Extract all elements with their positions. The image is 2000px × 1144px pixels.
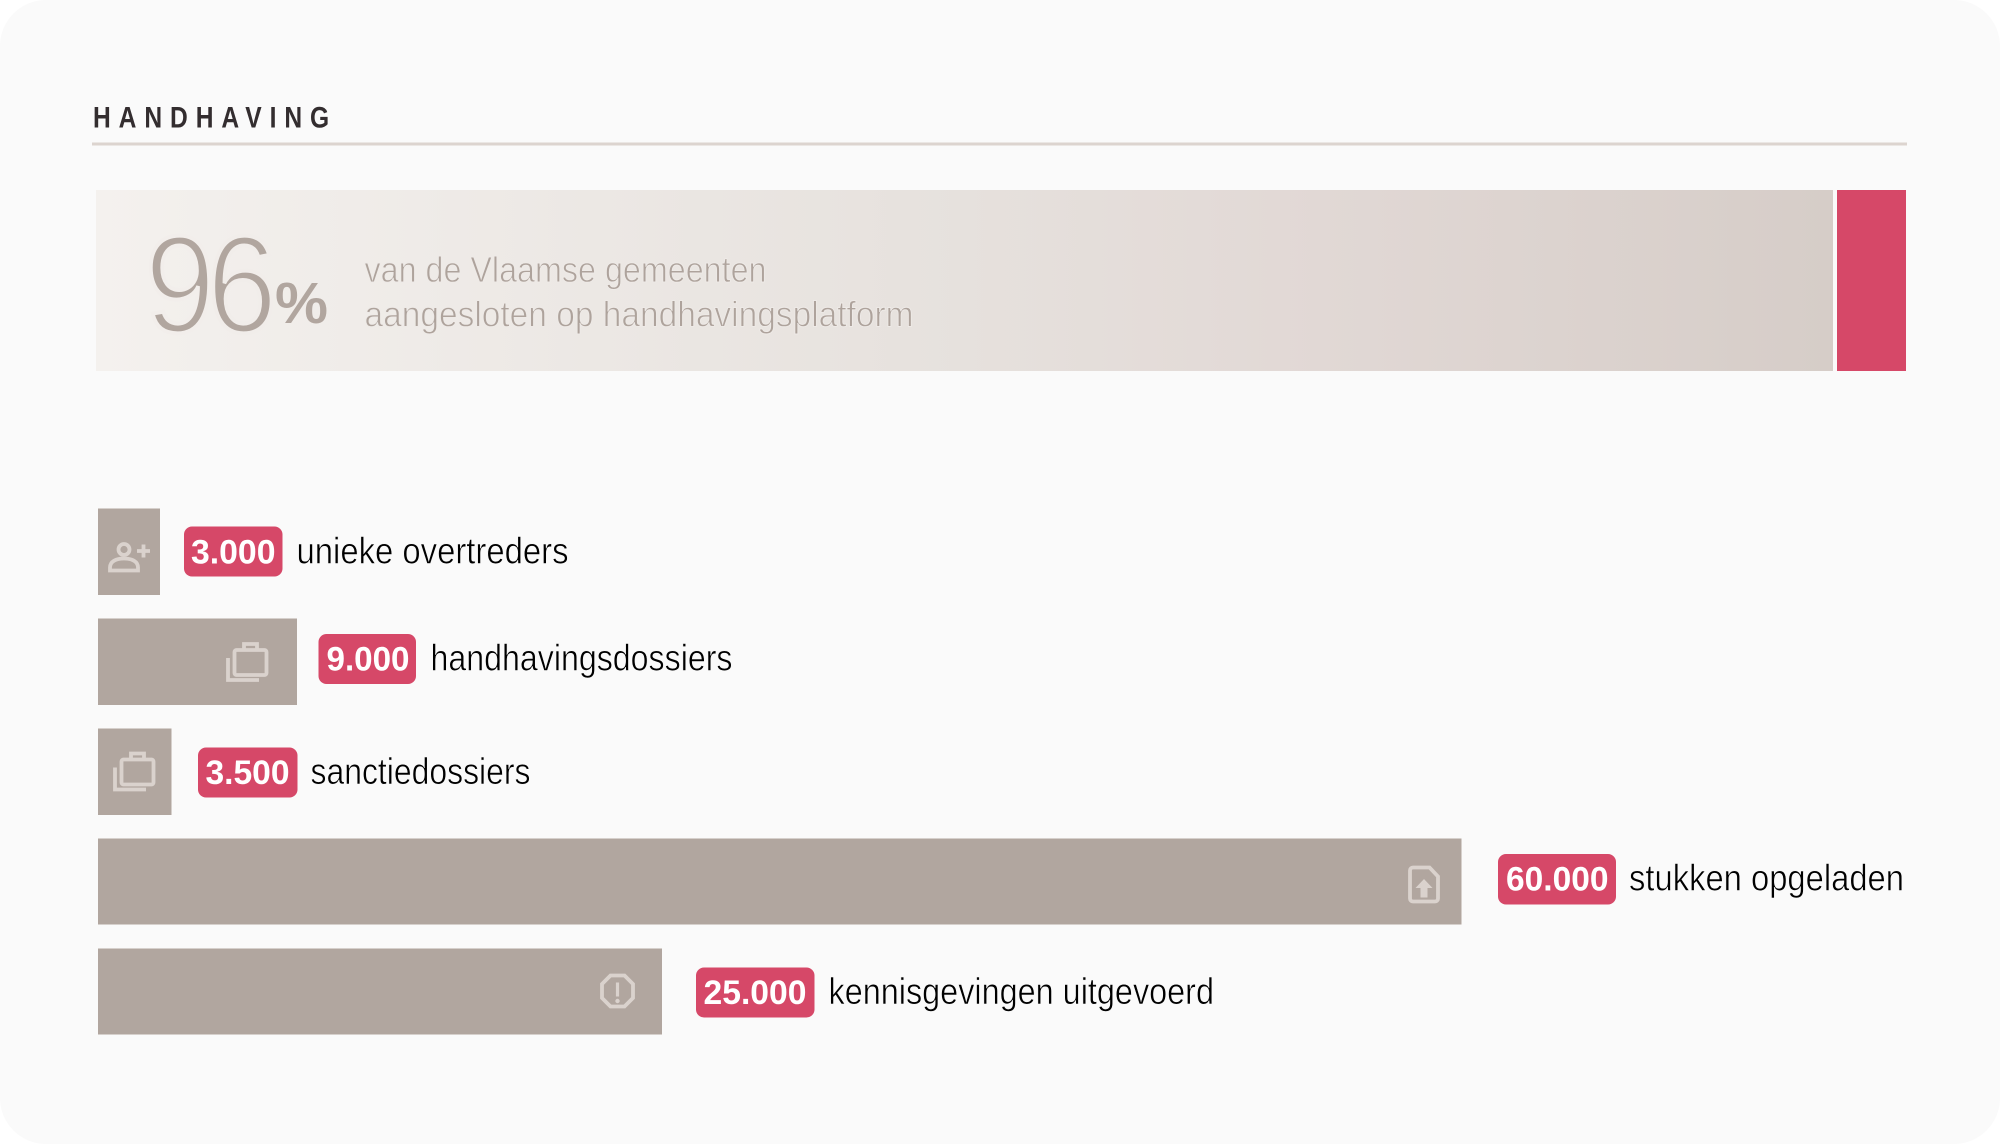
icon: warning octagon bbox=[602, 976, 633, 1006]
row: stukken opgeladen bbox=[98, 838, 1904, 924]
label: stukken opgeladen bbox=[1629, 858, 1904, 899]
icon: file upload bbox=[1410, 868, 1438, 902]
bar bbox=[98, 948, 662, 1034]
row: sanctiedossiers bbox=[98, 728, 530, 815]
value badge bbox=[696, 968, 814, 1018]
value badge: 3.000 bbox=[191, 533, 276, 571]
heading bbox=[92, 100, 1907, 146]
row: handhavingsdossiers bbox=[98, 618, 732, 705]
big number 96%: 9 bbox=[145, 208, 215, 362]
icon: person plus bbox=[110, 544, 150, 570]
red bar: remaining municipalities bbox=[1837, 190, 1906, 371]
value badge: 9.000 bbox=[326, 641, 410, 679]
icon: briefcase stack bbox=[228, 644, 266, 680]
row: kennisgevingen uitgevoerd bbox=[98, 948, 1214, 1034]
icon: briefcase stack bbox=[115, 754, 154, 790]
value badge bbox=[1498, 854, 1616, 904]
panel: 96 percent of municipalities bbox=[96, 190, 1906, 371]
value badge bbox=[318, 634, 416, 684]
value badge bbox=[198, 748, 298, 798]
description text: aangesloten op handhavingsplatform bbox=[364, 294, 914, 335]
big number 96% bbox=[145, 208, 328, 362]
value badge: 60.000 bbox=[1506, 861, 1608, 899]
label: kennisgevingen uitgevoerd bbox=[828, 971, 1214, 1012]
label: sanctiedossiers bbox=[310, 751, 530, 792]
label: handhavingsdossiers bbox=[430, 638, 732, 679]
heading: HANDHAVING bbox=[93, 100, 329, 134]
row: unieke overtreders bbox=[98, 508, 568, 595]
value badge bbox=[184, 526, 282, 576]
gradient bar: connected municipalities bbox=[96, 190, 1833, 371]
description text bbox=[364, 249, 914, 335]
value badge: 3.500 bbox=[206, 754, 290, 792]
value badge: 25.000 bbox=[704, 974, 806, 1012]
big number 96%: % bbox=[275, 271, 328, 336]
bar bbox=[98, 728, 172, 815]
bar bbox=[98, 618, 297, 705]
bar bbox=[98, 508, 160, 595]
big number 96%: 6 bbox=[207, 208, 277, 362]
label: unieke overtreders bbox=[296, 530, 568, 571]
bar bbox=[98, 838, 1462, 924]
description text: van de Vlaamse gemeenten bbox=[364, 249, 766, 290]
